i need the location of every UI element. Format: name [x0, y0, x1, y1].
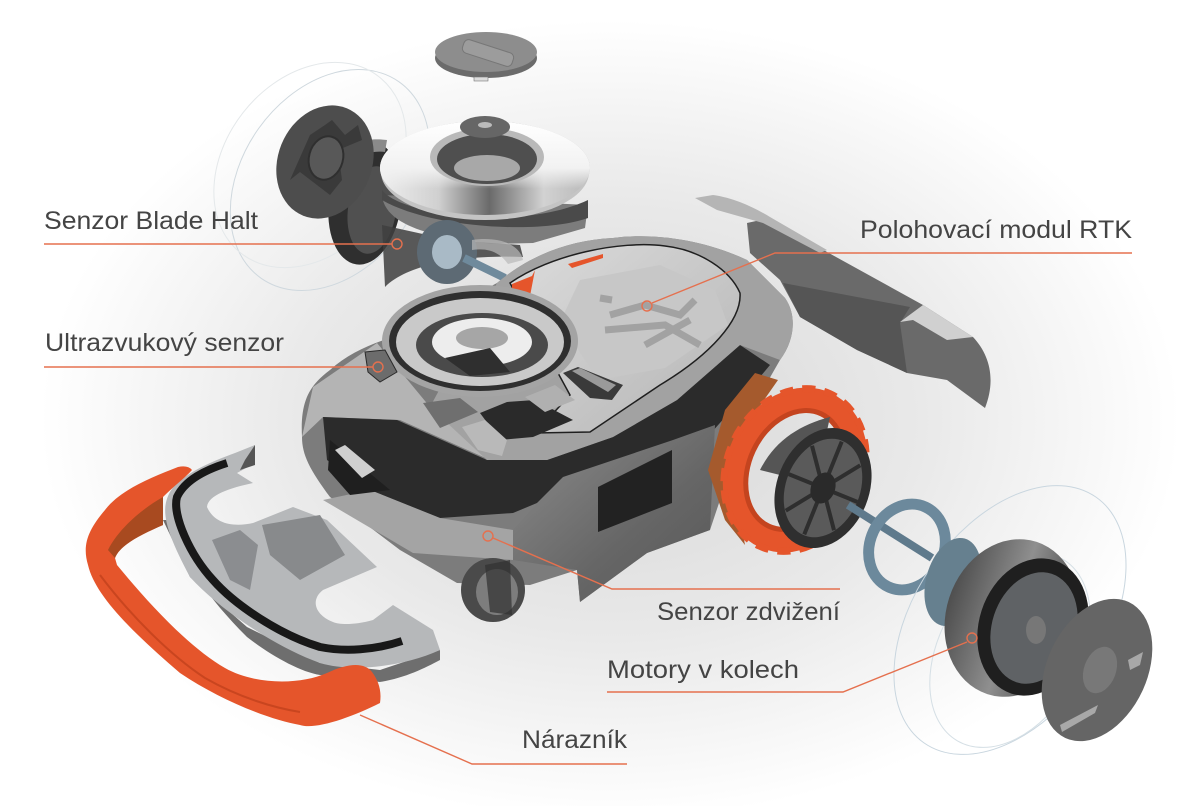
component: orange accents on top: [512, 254, 603, 296]
leader line: Nárazník: [360, 715, 627, 764]
leader line: Ultrazvukový senzor: [44, 362, 383, 372]
leader line: Senzor zdvižení: [483, 531, 840, 589]
label: Motory v kolech: Motory v kolech: [607, 656, 799, 684]
label: Senzor zdvižení: Senzor zdvižení: [657, 598, 840, 626]
label: Polohovací modul RTK: Polohovací modul RTK: [860, 216, 1132, 244]
component: wheel bracket inside tire: [760, 417, 830, 475]
component: right wheel gear: [915, 532, 991, 632]
component: robot body shell: [302, 236, 793, 602]
component: front caster wheel: [461, 558, 525, 622]
component: metal chassis plate: [163, 445, 440, 682]
component: orange bumper: [86, 466, 381, 726]
component: console details: [423, 367, 623, 456]
leader line: Polohovací modul RTK: [642, 253, 1132, 311]
component: gear ring: [855, 491, 959, 603]
component: right wheel cover: [1020, 581, 1174, 759]
label: Ultrazvukový senzor: Ultrazvukový senzor: [45, 329, 284, 357]
component: canopy over RTK module: [430, 236, 793, 460]
component: ultrasonic sensor block: [365, 350, 397, 382]
component: orange wheel tread: [698, 365, 892, 575]
component: blade shield and gear: [382, 220, 523, 287]
leader line: Senzor Blade Halt: [44, 239, 402, 249]
component: rear right cover: [695, 195, 991, 408]
leader line: Motory v kolech: [607, 633, 977, 692]
component: top cover disc: [435, 32, 537, 81]
component: right wheel motor: [925, 522, 1106, 714]
component: wheel hub: [757, 413, 889, 563]
component: left wheel motor: [321, 137, 409, 269]
component: silver blade disc housing: [380, 116, 590, 244]
component: left wheel cover: [260, 91, 390, 233]
component: blade mount on body: [382, 285, 578, 397]
label: Senzor Blade Halt: Senzor Blade Halt: [44, 207, 258, 235]
component: axle: [848, 505, 932, 558]
label: Nárazník: Nárazník: [522, 726, 628, 754]
component: translucent wheel band: [708, 373, 778, 545]
component: left wheel orbit arcs: [174, 24, 471, 329]
component: right wheel orbit arcs: [846, 443, 1174, 797]
